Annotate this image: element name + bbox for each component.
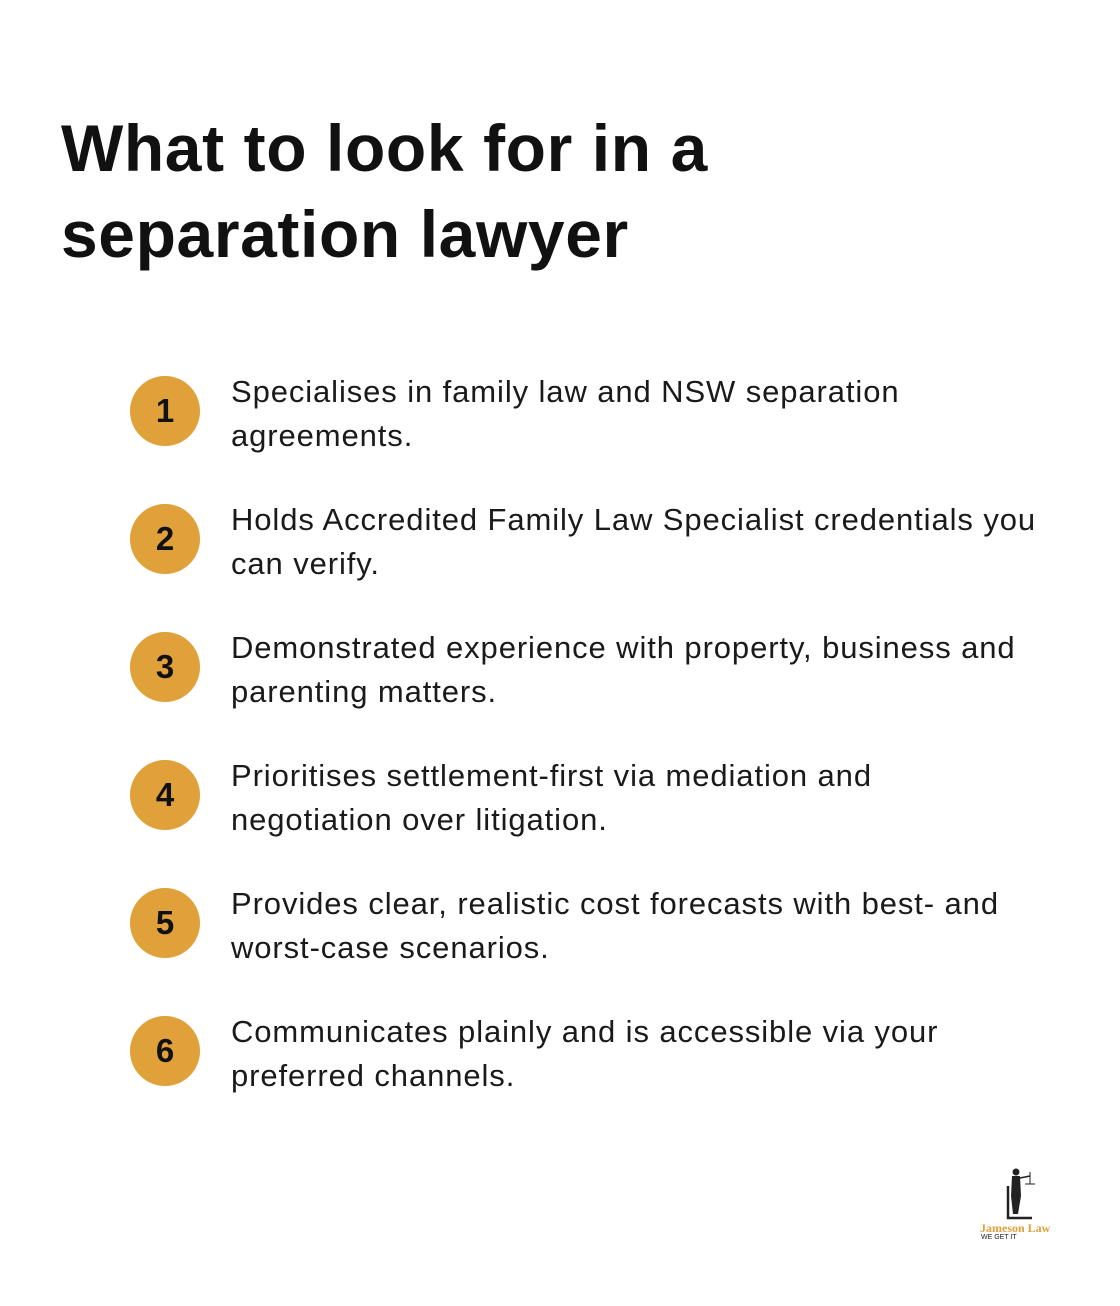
item 6: Communicates plainly and is accessible via your	[231, 1014, 938, 1049]
title	[61, 111, 708, 271]
item 6: 6	[156, 1032, 174, 1069]
item 6: preferred channels.	[231, 1058, 515, 1093]
item 2: can verify.	[231, 546, 380, 581]
item 4: 4	[156, 776, 174, 813]
item 3: 3	[156, 648, 174, 685]
item 3: Demonstrated experience with property, business and	[231, 630, 1016, 665]
title: What to look for in a	[61, 111, 708, 185]
logo: WE GET IT	[981, 1234, 1017, 1241]
icon: lady justice	[1006, 1168, 1035, 1220]
title: separation lawyer	[61, 197, 629, 271]
item 2: Holds Accredited Family Law Specialist credentials you	[231, 502, 1036, 537]
logo text: Jameson Law	[980, 1221, 1050, 1235]
item 1: agreements.	[231, 418, 413, 453]
logo	[980, 1168, 1050, 1241]
item 5	[130, 886, 999, 965]
item 5: worst-case scenarios.	[231, 930, 550, 965]
item 1	[130, 374, 900, 453]
item 4	[130, 758, 872, 837]
item 3	[130, 630, 1016, 709]
item 4: negotiation over litigation.	[231, 802, 608, 837]
item 5: Provides clear, realistic cost forecasts with best- and	[231, 886, 999, 921]
item 1: Specialises in family law and NSW separation	[231, 374, 900, 409]
item 5: 5	[156, 904, 174, 941]
item 3: parenting matters.	[231, 674, 497, 709]
item 2: 2	[156, 520, 174, 557]
item 1: 1	[156, 392, 174, 429]
item 4: Prioritises settlement-first via mediation and	[231, 758, 872, 793]
item 6	[130, 1014, 938, 1093]
item 2	[130, 502, 1036, 581]
